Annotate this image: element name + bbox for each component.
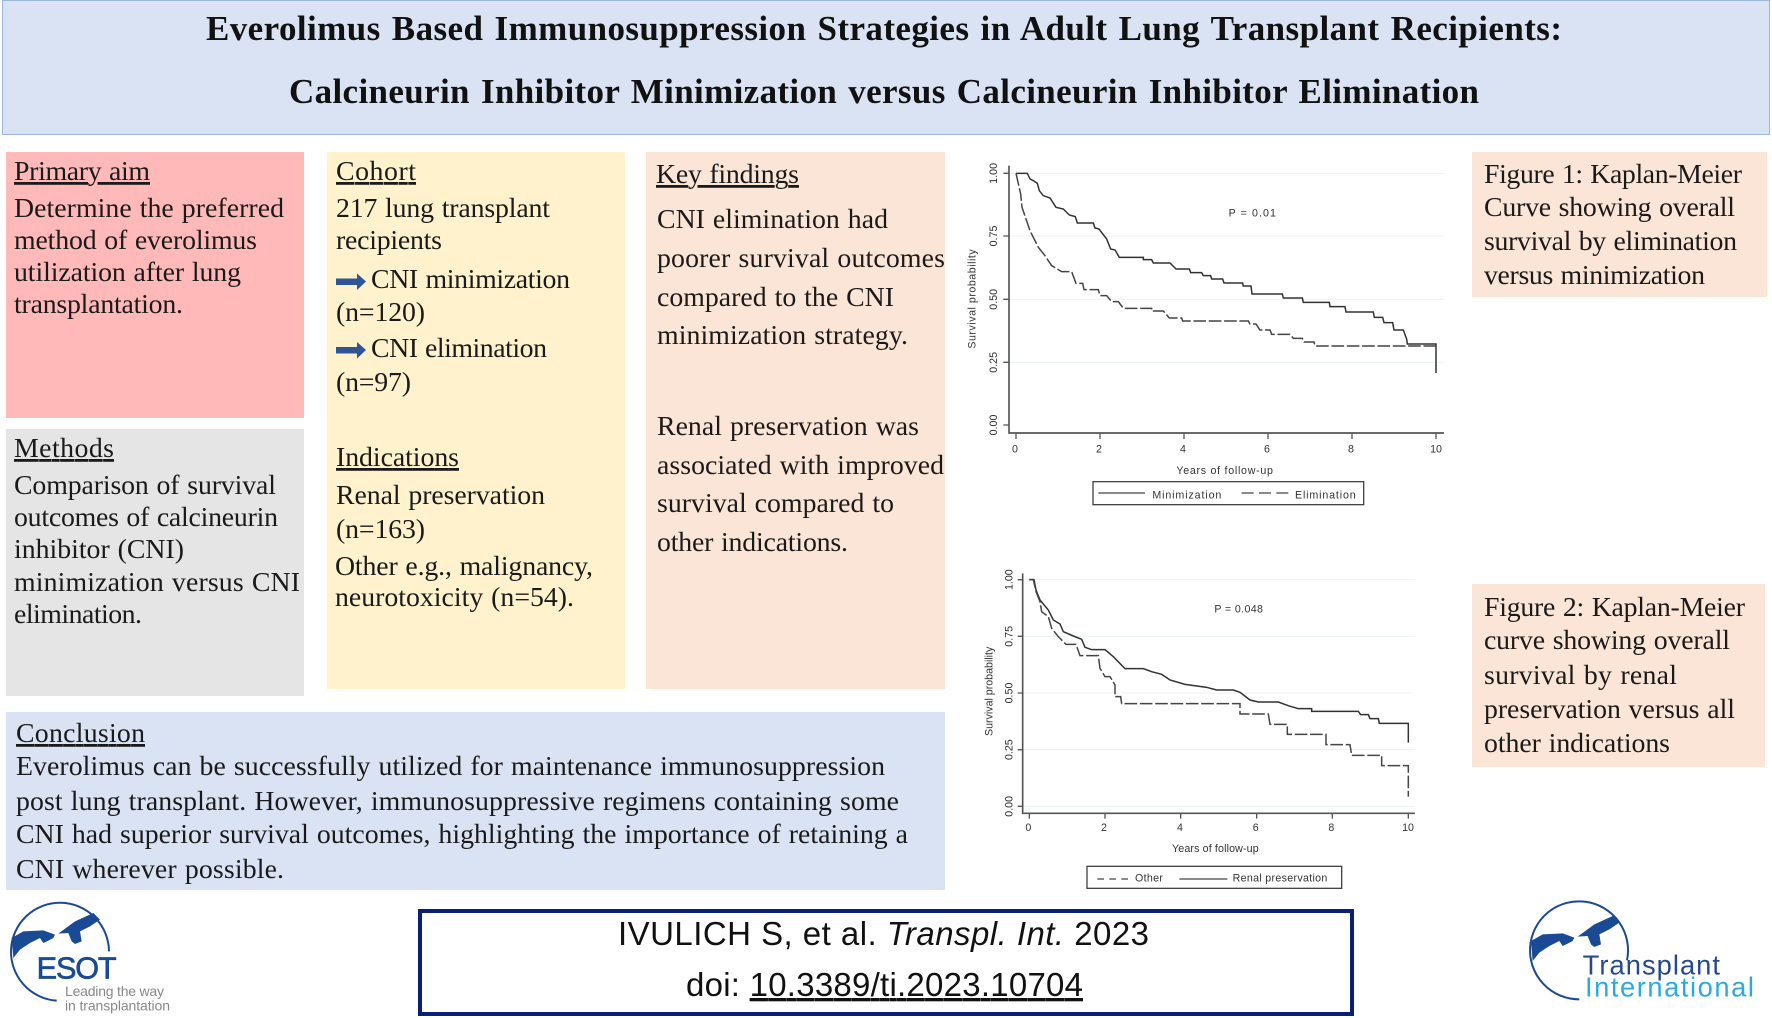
- logo: ESOT: [11, 903, 170, 1014]
- chart: Kaplan-Meier figure 1: Elimination: [1295, 489, 1356, 501]
- title banner: Everolimus Based Immunosuppression Strategies in Adult Lung Transplant Recipients:: [206, 9, 1562, 48]
- chart: Kaplan-Meier figure 1: 8: [1348, 443, 1354, 455]
- chart: Kaplan-Meier figure 2: Renal preservation: [1233, 872, 1327, 884]
- icon: reaching hands: [1531, 916, 1619, 961]
- panel: methods: inhibitor (CNI): [14, 534, 184, 565]
- chart: Kaplan-Meier figure 1: Years of follow-up: [1176, 465, 1273, 477]
- panel: methods: Methods: [14, 433, 114, 464]
- panel: cohort and indications: Other e.g., malignancy,: [335, 551, 593, 582]
- chart: Kaplan-Meier figure 1: 0.00: [988, 415, 1000, 435]
- chart: Kaplan-Meier figure 2: 0.25: [1003, 739, 1015, 760]
- logo: Transplant International: International: [1585, 971, 1754, 1002]
- caption: figure 1: survival by elimination: [1484, 226, 1737, 257]
- panel: cohort and indications: (n=120): [336, 297, 425, 328]
- panel: conclusion: [6, 712, 945, 890]
- citation box: [420, 911, 1352, 1014]
- title banner: Calcineurin Inhibitor Minimization versus Calcineurin Inhibitor Elimination: [289, 72, 1479, 111]
- caption: figure 2: Figure 2: Kaplan-Meier: [1484, 592, 1746, 623]
- icon: arrow to CNI minimization: [336, 274, 366, 290]
- panel: cohort and indications: neurotoxicity (n=54).: [335, 582, 574, 613]
- chart: Kaplan-Meier figure 1: P = 0.01: [1229, 208, 1276, 220]
- caption: figure 2: curve showing overall: [1484, 625, 1730, 656]
- panel: cohort and indications: [327, 152, 625, 689]
- panel: key findings: CNI elimination had: [657, 204, 888, 235]
- logo: ESOT: Leading the way: [65, 983, 164, 999]
- citation box: doi: 10.3389/ti.2023.10704: [686, 966, 1083, 1003]
- chart: Kaplan-Meier figure 2: [984, 569, 1415, 888]
- panel: cohort and indications: (n=97): [336, 367, 411, 398]
- panel: methods: outcomes of calcineurin: [14, 502, 278, 533]
- panel: cohort and indications: Renal preservation: [336, 480, 545, 511]
- panel: cohort and indications: Indications: [336, 442, 459, 473]
- chart: Kaplan-Meier figure 1: Minimization: [1152, 489, 1221, 501]
- chart: Kaplan-Meier figure 2: 4: [1177, 822, 1183, 834]
- panel: cohort and indications: CNI elimination: [371, 333, 547, 364]
- panel: cohort and indications: (n=163): [336, 514, 425, 545]
- caption: figure 2: survival by renal: [1484, 660, 1677, 691]
- chart: Kaplan-Meier figure 2: 0: [1025, 822, 1031, 834]
- chart: Kaplan-Meier figure 2: P = 0.048: [1214, 604, 1263, 616]
- caption: figure 1: Figure 1: Kaplan-Meier: [1484, 159, 1743, 190]
- panel: key findings: other indications.: [657, 527, 848, 558]
- chart: Kaplan-Meier figure 1: [966, 163, 1445, 505]
- panel: methods: [6, 429, 304, 696]
- panel: key findings: Renal preservation was: [657, 411, 919, 442]
- panel: conclusion: Conclusion: [16, 718, 145, 749]
- panel: methods: minimization versus CNI: [14, 567, 300, 598]
- caption: figure 2: preservation versus all: [1484, 694, 1735, 725]
- panel: methods: elimination.: [14, 599, 142, 630]
- panel: primary aim: method of everolimus: [14, 225, 257, 256]
- logo: ESOT: ESOT: [37, 951, 117, 985]
- chart: Kaplan-Meier figure 2: Years of follow-up: [1172, 843, 1259, 855]
- chart: Kaplan-Meier figure 1: 0: [1012, 443, 1018, 455]
- panel: conclusion: CNI wherever possible.: [16, 854, 284, 885]
- panel: key findings: poorer survival outcomes: [657, 243, 945, 274]
- chart: Kaplan-Meier figure 1: 0.25: [988, 352, 1000, 373]
- icon: reaching hands: [12, 913, 100, 958]
- chart: Kaplan-Meier figure 2: 10: [1402, 822, 1414, 834]
- panel: conclusion: CNI had superior survival outcomes, highlighting the importance of retaining a: [16, 819, 908, 850]
- panel: primary aim: transplantation.: [14, 289, 183, 320]
- logo: Transplant International: Transplant: [1583, 949, 1720, 980]
- caption: figure 1: versus minimization: [1484, 260, 1705, 291]
- panel: cohort and indications: 217 lung transplant: [336, 193, 550, 224]
- panel: key findings: Key findings: [656, 159, 799, 190]
- panel: cohort and indications: recipients: [336, 225, 442, 256]
- caption: figure 1: [1472, 152, 1767, 297]
- chart: Kaplan-Meier figure 2: 6: [1253, 822, 1259, 834]
- panel: primary aim: Determine the preferred: [14, 193, 284, 224]
- panel: key findings: minimization strategy.: [657, 320, 908, 351]
- caption: figure 1: Curve showing overall: [1484, 192, 1735, 223]
- caption: figure 2: [1472, 584, 1765, 767]
- title banner: [2, 0, 1770, 134]
- panel: cohort and indications: CNI minimization: [371, 264, 570, 295]
- panel: key findings: associated with improved: [657, 450, 944, 481]
- logo: ESOT: in transplantation: [65, 998, 170, 1014]
- chart: Kaplan-Meier figure 1: 10: [1430, 443, 1442, 455]
- panel: key findings: survival compared to: [657, 488, 894, 519]
- panel: primary aim: [6, 152, 304, 418]
- citation box: IVULICH S, et al. Transpl. Int. 2023: [618, 915, 1149, 952]
- chart: Kaplan-Meier figure 1: 0.50: [988, 289, 1000, 310]
- caption: figure 2: other indications: [1484, 728, 1670, 759]
- chart: Kaplan-Meier figure 1: 4: [1180, 443, 1186, 455]
- panel: key findings: compared to the CNI: [657, 282, 894, 313]
- chart: Kaplan-Meier figure 1: 0.75: [988, 226, 1000, 246]
- chart: Kaplan-Meier figure 2: 0.50: [1003, 683, 1015, 703]
- chart: Kaplan-Meier figure 2: 0.00: [1003, 796, 1015, 817]
- chart: Kaplan-Meier figure 2: 8: [1328, 822, 1334, 834]
- chart: Kaplan-Meier figure 2: Other: [1135, 872, 1163, 884]
- panel: key findings: [646, 152, 945, 689]
- panel: primary aim: utilization after lung: [14, 257, 241, 288]
- panel: methods: Comparison of survival: [14, 470, 276, 501]
- chart: Kaplan-Meier figure 1: 2: [1096, 443, 1102, 455]
- chart: Kaplan-Meier figure 2: 1.00: [1003, 569, 1015, 590]
- panel: conclusion: post lung transplant. However, immunosuppressive regimens containing some: [16, 786, 899, 817]
- logo: Transplant International: [1530, 901, 1754, 1002]
- chart: Kaplan-Meier figure 1: 6: [1264, 443, 1270, 455]
- panel: primary aim: Primary aim: [14, 156, 150, 187]
- chart: Kaplan-Meier figure 2: 2: [1101, 822, 1107, 834]
- chart: Kaplan-Meier figure 1: Survival probability: [966, 249, 978, 349]
- chart: Kaplan-Meier figure 2: Survival probability: [984, 646, 996, 736]
- chart: Kaplan-Meier figure 2: 0.75: [1003, 626, 1015, 647]
- panel: conclusion: Everolimus can be successfully utilized for maintenance immunosuppression: [16, 751, 885, 782]
- icon: arrow to CNI elimination: [336, 342, 366, 358]
- chart: Kaplan-Meier figure 1: 1.00: [988, 163, 1000, 184]
- panel: cohort and indications: Cohort: [336, 156, 416, 187]
